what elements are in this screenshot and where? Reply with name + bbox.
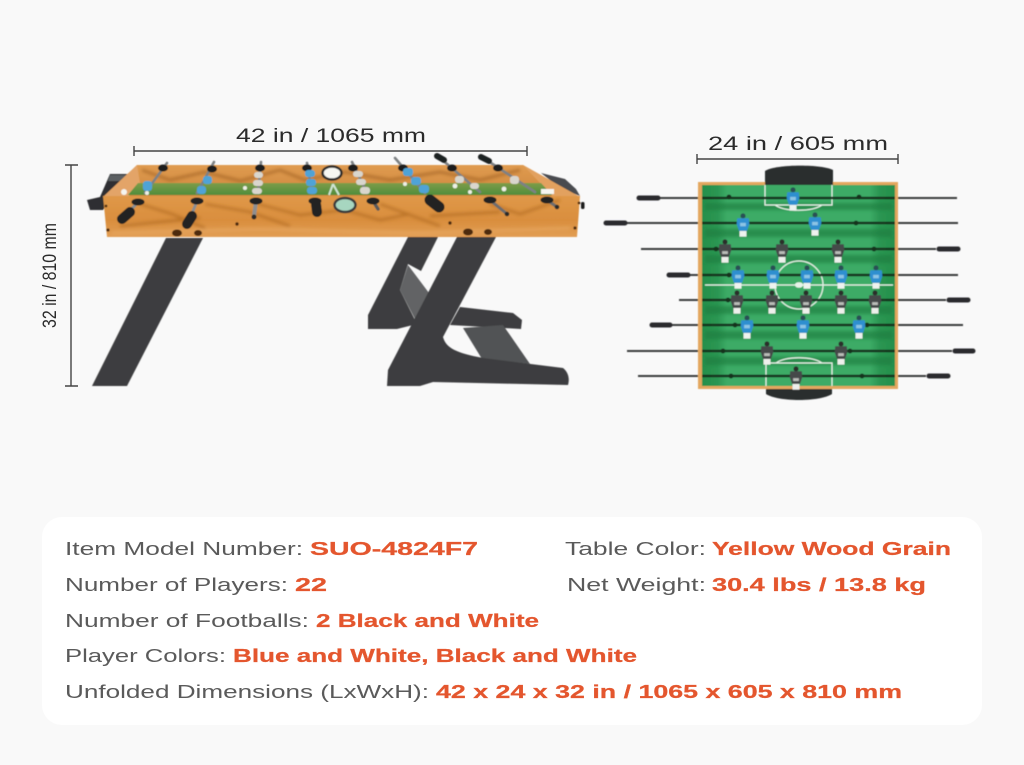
net weight: 30.4 lbs / 13.8 kg — [712, 575, 926, 595]
top goal bumper — [765, 166, 833, 184]
blue team figures — [143, 168, 429, 194]
width dimension: 24 in — [697, 134, 898, 164]
specification panel — [42, 517, 982, 725]
front rod sections — [122, 196, 559, 224]
rear foot — [450, 307, 522, 329]
number of footballs: 2 Black and White — [316, 611, 539, 631]
rod 4 — [308, 198, 322, 212]
front wood panel — [103, 196, 580, 237]
front folding leg — [387, 237, 569, 386]
rear leg — [368, 237, 438, 329]
green pitch — [702, 185, 895, 386]
top view of foosball table — [606, 166, 973, 400]
rod 2 — [187, 198, 204, 224]
height dimension: 32 in — [40, 165, 78, 386]
model number — [65, 539, 478, 559]
player colors — [65, 646, 637, 666]
table color — [565, 539, 951, 559]
edge bolts — [581, 202, 584, 209]
left handle highlight — [108, 175, 128, 181]
pitch markings — [705, 185, 893, 386]
white team figures — [252, 171, 519, 194]
ball by right corner — [541, 189, 554, 194]
lower score ring — [334, 198, 356, 212]
dimension line — [697, 154, 898, 164]
rod grips — [606, 198, 973, 376]
dimension label: 42 in / 1065 mm — [236, 126, 426, 147]
rod 3 — [250, 198, 262, 220]
model number: SUO-4824F7 — [310, 539, 478, 559]
ball by left corner — [121, 189, 127, 195]
gray cross brace — [400, 265, 429, 319]
number of footballs — [65, 611, 539, 631]
side view of foosball table — [87, 156, 584, 386]
centre markings on field — [329, 184, 339, 195]
rod 8 — [540, 196, 559, 209]
outer rod shafts — [627, 198, 963, 376]
unfolded dimensions — [65, 682, 902, 702]
number of players — [65, 575, 327, 595]
dimension line — [134, 146, 527, 156]
table body — [87, 156, 584, 237]
dimension label: 24 in / 605 mm — [708, 134, 888, 155]
side wall right — [523, 165, 580, 197]
number of players: 22 — [295, 575, 327, 595]
back wall grain — [142, 170, 520, 181]
wood frame — [698, 182, 898, 389]
rod collars — [714, 195, 876, 378]
wood grain streaks — [112, 200, 570, 233]
side-view players — [143, 168, 519, 195]
rear rod sections — [145, 158, 535, 193]
goal bumper overlay — [765, 175, 833, 185]
near leg — [92, 238, 203, 386]
width dimension: 42 in — [134, 126, 527, 156]
table color: Table Color: — [565, 539, 706, 559]
players — [719, 187, 882, 390]
unfolded dimensions: Unfolded Dimensions (LxWxH): — [65, 682, 429, 702]
unfolded dimensions: 42 x 24 x 32 in / 1065 x 605 x 810 mm — [436, 682, 902, 702]
rod 7 — [484, 196, 509, 216]
rear rod grips — [437, 156, 489, 161]
left bumper handle — [87, 174, 128, 210]
playing field — [128, 183, 552, 195]
dimension line — [65, 165, 78, 386]
net weight — [567, 575, 926, 595]
player colors: Blue and White, Black and White — [233, 646, 637, 666]
net weight: Net Weight: — [567, 575, 706, 595]
rod 1 — [122, 198, 144, 219]
panel background — [42, 517, 982, 725]
rear rod holes — [158, 164, 503, 172]
player colors: Player Colors: — [65, 646, 226, 666]
rod 5 — [366, 198, 380, 209]
rod 6 — [430, 200, 439, 207]
number of footballs: Number of Footballs: — [65, 611, 309, 631]
dimension label: 32 in / 810 mm — [40, 223, 61, 328]
inner rods — [702, 198, 895, 376]
pitch shadows — [705, 203, 892, 365]
inner wall — [103, 165, 580, 197]
upper score ring — [322, 166, 342, 180]
bottom goal bumper — [766, 388, 832, 400]
screws — [105, 202, 580, 236]
lower gray brace — [463, 325, 530, 364]
right bumper handle — [541, 173, 580, 196]
side wall left — [103, 165, 140, 197]
model number: Item Model Number: — [65, 539, 303, 559]
white feet — [145, 182, 506, 195]
number of players: Number of Players: — [65, 575, 288, 595]
table legs — [92, 237, 569, 386]
table color: Yellow Wood Grain — [712, 539, 951, 559]
